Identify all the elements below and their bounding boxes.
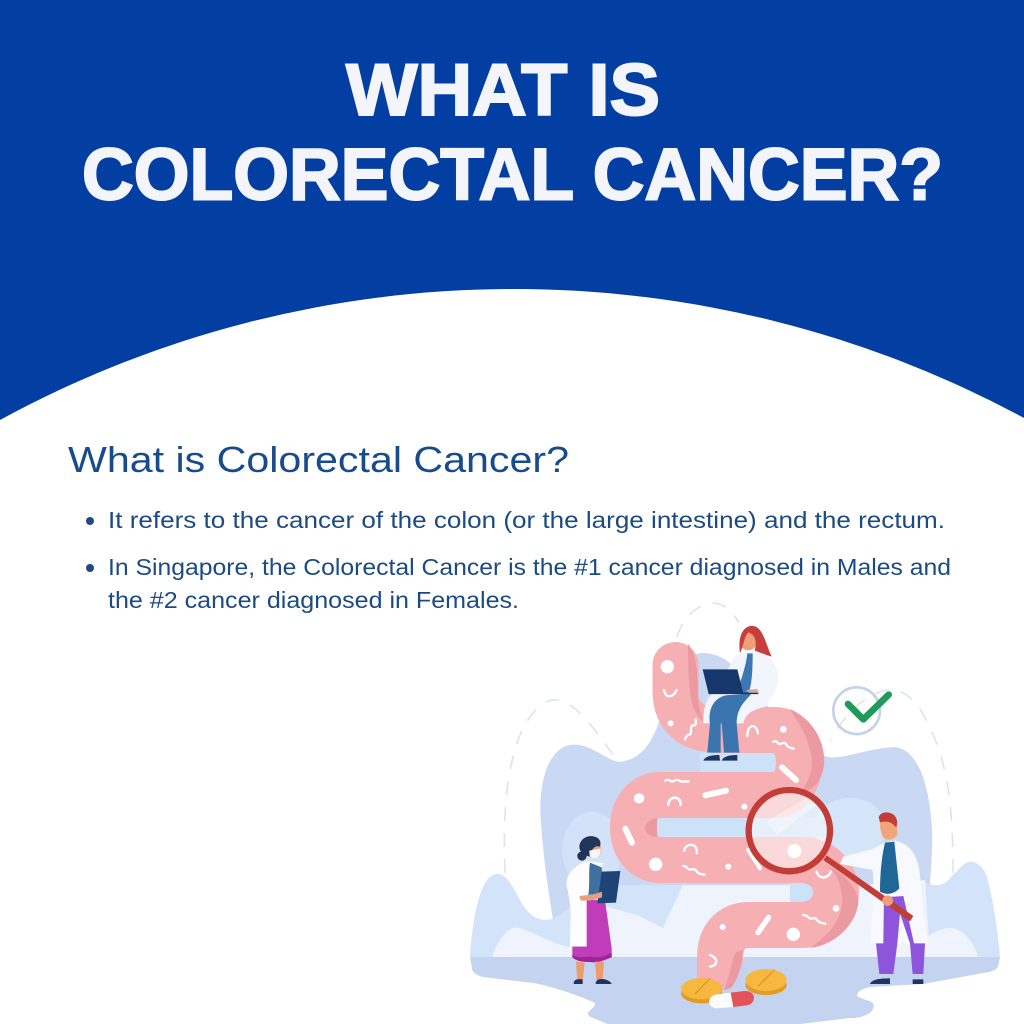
face xyxy=(740,633,757,650)
shoes xyxy=(703,755,737,761)
bullet list xyxy=(86,507,951,613)
dashed arcs xyxy=(504,603,953,873)
colon spots, right xyxy=(787,872,839,941)
hands xyxy=(579,892,602,901)
pill: left tablet xyxy=(681,978,722,1003)
bullet list: It refers to the cancer of the colon (or the large intestine) and the rectum. xyxy=(108,507,945,533)
bullet list: In Singapore, the Colorectal Cancer is the #1 cancer diagnosed in Males and xyxy=(108,554,951,580)
background blob: cloud behind doctor xyxy=(814,798,886,858)
scrub top xyxy=(737,653,753,693)
figure: doctor with laptop xyxy=(703,626,778,761)
colon body xyxy=(633,665,836,958)
title: WHAT IS xyxy=(346,50,660,131)
coat xyxy=(703,652,778,723)
coat xyxy=(567,862,603,946)
background blob: light right xyxy=(860,862,1000,957)
colon xyxy=(625,644,858,991)
hair xyxy=(879,812,897,827)
clipboard xyxy=(597,871,620,903)
shoes xyxy=(574,979,612,984)
shirt xyxy=(880,842,899,894)
skirt xyxy=(572,900,612,962)
legs xyxy=(576,962,604,980)
colon stem xyxy=(697,950,743,991)
background blob: large blue xyxy=(540,653,932,960)
colon spots, lower xyxy=(625,793,769,967)
colon gap tints xyxy=(650,745,820,906)
pill: capsule xyxy=(709,991,754,1008)
illustration: doctors examining the colon xyxy=(470,603,1000,1024)
magnifier handle xyxy=(823,855,913,921)
title: COLORECTAL CANCER? xyxy=(82,134,943,216)
pants xyxy=(876,896,925,974)
face xyxy=(880,821,897,840)
bullet list: the #2 cancer diagnosed in Females. xyxy=(108,587,519,613)
magnifying glass xyxy=(749,790,830,871)
background blob: pale foreground xyxy=(492,880,930,957)
hand xyxy=(882,895,893,906)
hair xyxy=(579,836,600,857)
hand xyxy=(747,689,758,692)
background blob: light left xyxy=(470,874,700,957)
shoes xyxy=(870,978,923,984)
hair xyxy=(739,626,772,657)
coat xyxy=(840,841,928,943)
figure: doctor with magnifier xyxy=(823,812,928,984)
background blob: cloud behind clipboard doctor xyxy=(562,812,622,888)
ring xyxy=(749,790,830,871)
mask xyxy=(589,848,601,858)
icon: green check in circle xyxy=(833,687,889,734)
background hills: pale right xyxy=(928,928,978,957)
title xyxy=(82,50,943,216)
scrub top xyxy=(588,863,603,895)
ground xyxy=(470,957,1000,1024)
header panel: blue curved banner xyxy=(0,0,1024,420)
laptop xyxy=(703,669,743,694)
legs xyxy=(707,693,752,753)
colon shading xyxy=(645,644,858,990)
lens xyxy=(749,791,829,871)
pill: right tablet xyxy=(745,969,787,995)
figure: doctor with clipboard xyxy=(567,836,620,984)
skirt hem xyxy=(572,953,612,962)
pills xyxy=(681,969,787,1008)
section heading: What is Colorectal Cancer? xyxy=(68,439,569,480)
colon spots, upper xyxy=(634,660,796,805)
face xyxy=(585,842,601,858)
